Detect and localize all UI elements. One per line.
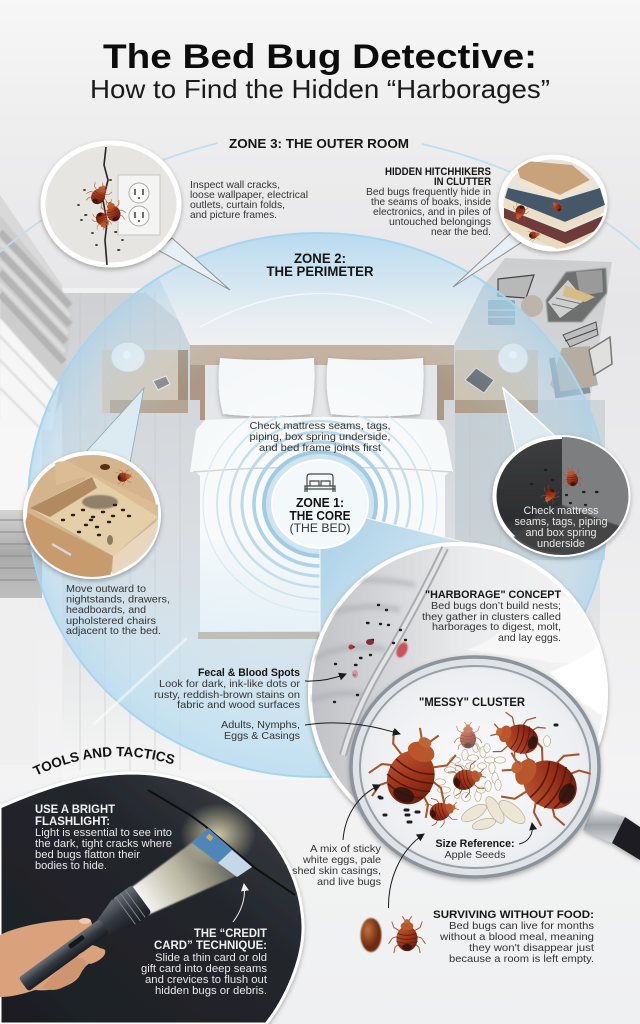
- hidden hitchhikers text: [366, 166, 491, 238]
- hidden hitchhikers text: near the bed.: [431, 227, 491, 238]
- nightstand right with lamp and book: [455, 343, 538, 413]
- hidden hitchhikers text: HIDDEN HITCHHIKERS: [385, 166, 491, 178]
- zone 1 core circle: [272, 460, 368, 548]
- hidden hitchhikers text: IN CLUTTER: [434, 176, 491, 188]
- tools and tactics heading: TOOLS AND TACTICS: [32, 746, 174, 774]
- bed check text: [250, 421, 390, 454]
- drawer text: upholstered chairs: [66, 616, 156, 627]
- harborage concept text: and lay eggs.: [498, 633, 561, 644]
- surviving without food text: because a room is left empty.: [449, 954, 594, 965]
- size reference label: Size Reference:: [436, 838, 514, 850]
- zone 1 wedge toward the fabric close-up: [320, 518, 480, 640]
- nightstand left with lamp and phone: [102, 342, 188, 413]
- arrow to credit card: [233, 884, 245, 922]
- flashlight tip text: FLASHLIGHT:: [35, 814, 110, 828]
- adults nymphs label: Adults, Nymphs,: [221, 720, 300, 731]
- adults nymphs label: Eggs & Casings: [224, 731, 300, 742]
- bed check text: Check mattress seams, tags,: [250, 421, 390, 432]
- pillows: [219, 358, 424, 416]
- drawer text: headboards, and: [66, 605, 146, 616]
- arrows pointing at the magnifier and fabric: [305, 674, 532, 908]
- callout wedges: [85, 232, 556, 463]
- credit card tip text: hidden bugs or debris.: [155, 985, 267, 997]
- egg mix text: shed skin casings,: [292, 866, 381, 877]
- flashlight tip text: Light is essential to see into: [35, 827, 172, 839]
- surviving without food text: SURVIVING WITHOUT FOOD:: [433, 909, 594, 921]
- dark circle caption: seams, tags, piping: [514, 516, 608, 528]
- zone 1 label: ZONE 1:: [296, 496, 344, 510]
- surviving without food text: without a blood meal, meaning: [439, 932, 594, 943]
- icon: hand: [0, 920, 104, 997]
- duvet: [190, 417, 453, 632]
- panel: books in clutter: [501, 157, 606, 252]
- wall inspection text: [190, 180, 308, 221]
- flashlight tip text: bed bugs flatton their: [35, 849, 140, 861]
- wall inspection text: Inspect wall cracks,: [190, 180, 280, 191]
- harborage concept text: they gather in clusters called: [422, 612, 561, 623]
- wall inspection text: and picture frames.: [190, 210, 277, 221]
- fecal and blood spots text: [154, 667, 301, 711]
- zone 1 label: [290, 496, 351, 535]
- bed: [190, 334, 454, 639]
- dark circle caption: [514, 505, 608, 550]
- zone 3 heading: ZONE 3: THE OUTER ROOM: [229, 136, 409, 151]
- drawer text: adjacent to the bed.: [66, 626, 161, 637]
- drawer text: Move outward to: [66, 584, 146, 595]
- bed check text: and bed frame joints first: [259, 443, 381, 454]
- egg mix text: A mix of sticky: [310, 844, 382, 855]
- magnifying glass handle: [583, 807, 640, 860]
- credit card tip text: CARD” TECHNIQUE:: [154, 938, 267, 952]
- harborage concept text: Bed bugs don’t build nests;: [431, 601, 561, 612]
- drawer text: nightstands, drawers,: [66, 594, 170, 606]
- credit card tip text: [141, 926, 268, 997]
- wall inspection text: outlets, curtain folds,: [190, 200, 285, 211]
- egg mix text: and live bugs: [317, 877, 381, 888]
- drawer text: [66, 584, 170, 637]
- apple seeds comparison shells: [461, 796, 526, 830]
- zone 3 outer room arc: [0, 143, 640, 252]
- light beam: [128, 838, 245, 915]
- fecal and blood spots text: rusty, reddish-brown stains on: [154, 690, 300, 701]
- room: floor, walls and window side: [0, 195, 612, 780]
- dark circle caption: Check mattress: [524, 505, 598, 517]
- harborage concept text: "HARBORAGE" CONCEPT: [425, 589, 562, 601]
- icon: apple seed: [360, 918, 382, 952]
- zone 1 label: THE CORE: [290, 509, 350, 523]
- bed check text: piping, box spring underside,: [250, 432, 390, 443]
- hidden hitchhikers text: untouched belongings: [389, 217, 491, 228]
- hidden hitchhikers text: Bed bugs frequently hide in: [366, 187, 491, 198]
- bed bugs: [368, 728, 457, 818]
- harborage concept text: harborages to digest, molt,: [432, 622, 561, 633]
- dark circle caption: underside: [537, 538, 585, 550]
- messy cluster heading: "MESSY" CLUSTER: [419, 697, 526, 709]
- surviving without food text: Bed bugs can live for months: [449, 921, 594, 932]
- zone 2 heading: ZONE 2:: [294, 251, 346, 266]
- flashlight tip text: the dark, tight cracks where: [35, 838, 172, 850]
- credit card tip text: Slide a thin card or old: [155, 952, 267, 964]
- zone 2 perimeter circle: [27, 232, 606, 778]
- flashlight tip text: [35, 802, 172, 872]
- zone 1 label: (THE BED): [290, 521, 351, 535]
- zone 2 heading: THE PERIMETER: [266, 264, 374, 279]
- hidden hitchhikers text: electronics, and in piles of: [373, 207, 491, 218]
- surviving without food text: they won't disappear just: [469, 943, 594, 954]
- fecal and blood spots text: fabric and wood surfaces: [177, 700, 300, 711]
- dark circle caption: and box spring: [526, 527, 597, 539]
- egg mix text: [292, 844, 382, 888]
- surviving without food text: [433, 909, 594, 965]
- panel: dark corner with bugs: [494, 435, 632, 560]
- panel: wall crack and outlet: [43, 143, 179, 265]
- zone 2 heading: [266, 251, 374, 279]
- icon: bed bug for scale: [389, 916, 425, 953]
- icon: bed: [305, 474, 335, 492]
- flashlight tip text: bodies to hide.: [35, 860, 107, 872]
- title: The Bed Bug Detective:: [103, 38, 537, 76]
- harborage concept text: [422, 589, 562, 644]
- subtitle: How to Find the Hidden “Harborages”: [90, 74, 550, 104]
- panel: fabric seam harborage circle: [310, 544, 610, 844]
- fecal and blood spots text: Look for dark, ink-like dots or: [159, 679, 301, 690]
- credit card tip text: gift card into deep seams: [141, 963, 267, 975]
- egg mix text: white eggs, pale: [302, 855, 381, 866]
- wall inspection text: loose wallpaper, electrical: [190, 190, 308, 201]
- icon: credit card: [192, 828, 252, 877]
- credit card tip text: THE “CREDIT: [194, 926, 268, 940]
- flashlight tip text: USE A BRIGHT: [35, 802, 116, 816]
- panel: drawer with droppings: [20, 453, 159, 580]
- hidden hitchhikers text: the seams of boaks, inside: [371, 197, 491, 208]
- icon: flashlight: [20, 886, 150, 990]
- title: [90, 38, 550, 104]
- adults nymphs label: [221, 720, 300, 742]
- eggs cluster: [434, 736, 550, 802]
- magnifying glass: messy cluster: [351, 657, 599, 877]
- size reference label: [436, 838, 514, 861]
- panel: tools and tactics dark circle: [0, 773, 303, 1024]
- books and frames piled in the corner: [488, 268, 612, 395]
- size reference label: Apple Seeds: [444, 850, 506, 861]
- zone 1 rings radiating across the bed: [203, 396, 437, 612]
- credit card tip text: and crevices to flush out: [145, 974, 267, 986]
- fecal and blood spots text: Fecal & Blood Spots: [198, 667, 300, 679]
